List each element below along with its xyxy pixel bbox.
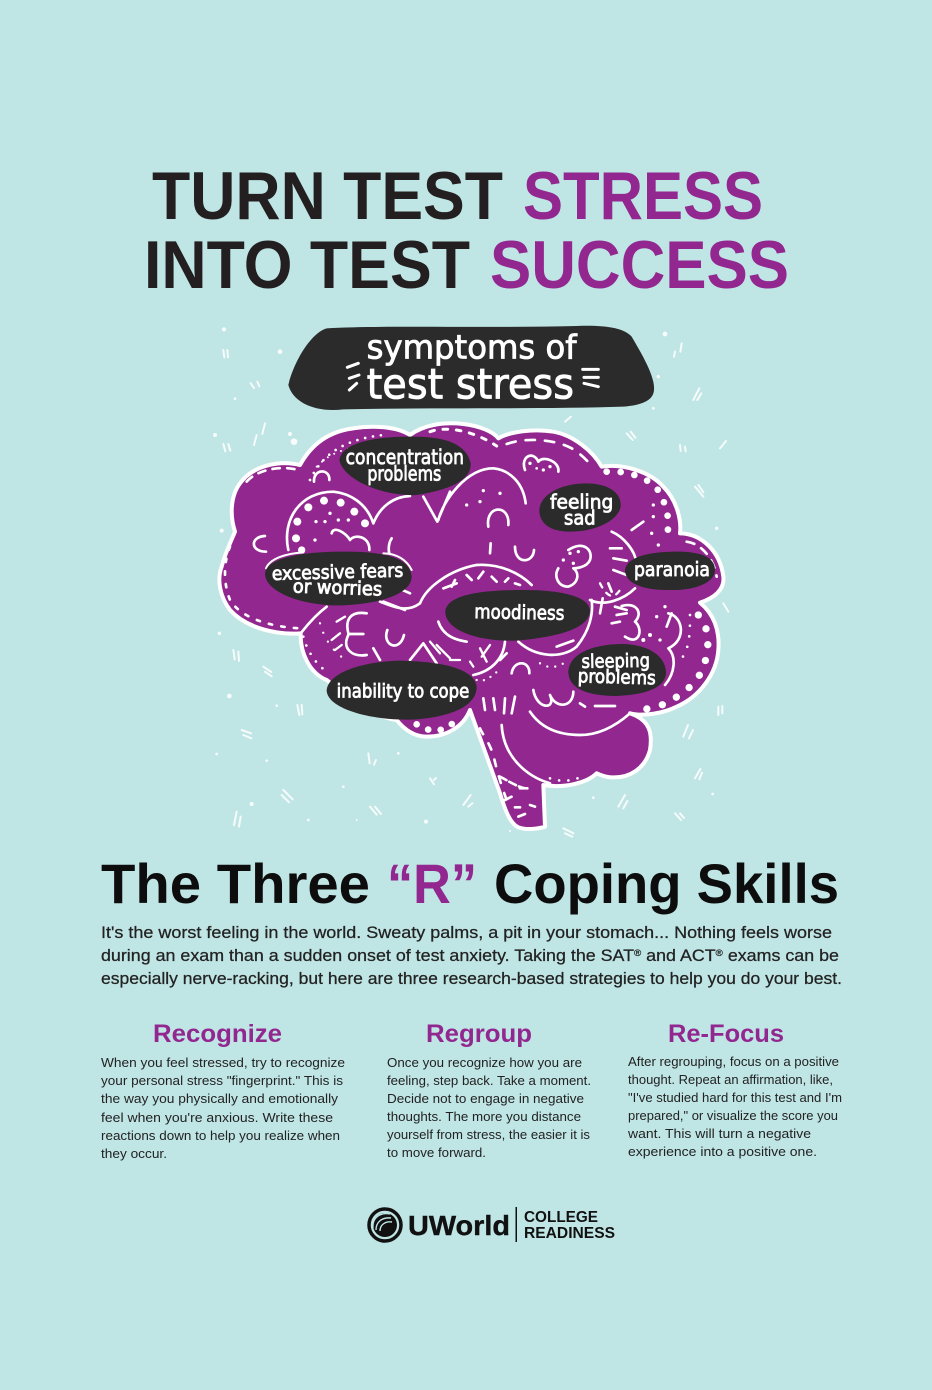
brain folds and line details [254, 456, 681, 783]
column: recognize: reactions down to help you realize when [101, 1128, 340, 1143]
heading: the three R coping skills [101, 852, 839, 915]
column: re-focus: After regrouping, focus on a positive [628, 1054, 839, 1069]
title: STRESS [523, 158, 763, 234]
symptom: moodiness [445, 590, 590, 641]
title bubble: symptoms of test stress [288, 326, 654, 410]
symptom: excessive fears or worries: excessive fears [272, 561, 403, 585]
column: regroup: Once you recognize how you are [387, 1055, 582, 1070]
column: regroup: feeling, step back. Take a moment. [387, 1073, 591, 1088]
column: regroup: Decide not to engage in negative [387, 1091, 584, 1106]
icon: uworld swirl [369, 1209, 401, 1241]
intro paragraph [101, 924, 842, 988]
title [144, 158, 789, 303]
background confetti [223, 343, 728, 837]
logo: uworld college readiness: UWorld [408, 1210, 510, 1241]
intro paragraph: especially nerve-racking, but here are three research-based strategies to help you do your best. [101, 970, 842, 988]
heading: the three R coping skills: “R” [387, 852, 477, 915]
symptom: feeling sad [539, 483, 621, 532]
title: TURN TEST [152, 158, 503, 234]
symptom: moodiness: moodiness [474, 600, 565, 625]
column: recognize: your personal stress "fingerprint." This is [101, 1073, 343, 1088]
column: recognize: feel when you're anxious. Write these [101, 1110, 333, 1125]
intro paragraph: during an exam than a sudden onset of test anxiety. Taking the SAT [101, 947, 594, 965]
symptom: sleeping problems: problems [578, 666, 656, 689]
brain dash and dot borders [225, 429, 717, 817]
symptom: concentration problems [339, 437, 471, 495]
title: SUCCESS [490, 227, 789, 303]
title: INTO TEST [144, 227, 470, 303]
logo: uworld college readiness: COLLEGE [524, 1209, 598, 1226]
column: regroup: Regroup [426, 1020, 532, 1048]
symptom: concentration problems: problems [367, 462, 441, 486]
column: re-focus [627, 1020, 842, 1159]
symptom: feeling sad: feeling [550, 491, 613, 514]
column: recognize: they occur. [101, 1146, 167, 1161]
symptom: feeling sad: sad [564, 507, 596, 530]
intro paragraph: It's the worst feeling in the world. Sweaty palms, a pit in your stomach... Nothing feels worse [101, 924, 832, 942]
column: re-focus: Re-Focus [668, 1020, 784, 1048]
symptom: sleeping problems [568, 644, 666, 696]
symptom: paranoia: paranoia [634, 558, 710, 581]
intro paragraph: ® [634, 948, 642, 958]
heading: the three R coping skills: Coping Skills [494, 852, 839, 915]
heading: the three R coping skills: The Three [101, 852, 370, 915]
column: re-focus: "I've studied hard for this test and I'm [628, 1090, 842, 1105]
intro paragraph: exams can be [723, 947, 839, 965]
column: recognize: When you feel stressed, try to recognize [101, 1055, 345, 1070]
logo: uworld college readiness [369, 1207, 615, 1242]
intro paragraph: and ACT [641, 947, 716, 965]
logo: uworld college readiness: READINESS [524, 1225, 615, 1242]
column: recognize: Recognize [153, 1020, 282, 1048]
column: regroup: to move forward. [387, 1145, 486, 1160]
symptom: inability to cope: inability to cope [337, 681, 469, 702]
title bubble: symptoms of test stress: symptoms of [367, 327, 578, 366]
intro paragraph: ® [716, 948, 723, 958]
column: recognize: the way you physically and emotionally [101, 1091, 338, 1106]
symptom: excessive fears or worries: or worries [292, 576, 383, 601]
symptom: sleeping problems: sleeping [581, 651, 650, 673]
column: re-focus: prepared," or visualize the score you [628, 1108, 838, 1123]
illustration: symptoms of test stress brain [213, 326, 728, 837]
symptom: inability to cope [327, 661, 477, 720]
title bubble: symptoms of test stress: test stress [367, 359, 574, 408]
column: regroup: yourself from stress, the easier it is [387, 1127, 590, 1142]
column: re-focus: experience into a positive one. [628, 1144, 817, 1159]
column: recognize [101, 1020, 345, 1161]
column: re-focus: want. This will turn a negative [627, 1126, 811, 1141]
symptom: excessive fears or worries [265, 552, 412, 605]
symptom: concentration problems: concentration [346, 445, 464, 469]
symptom: paranoia [625, 552, 715, 590]
brain silhouette [219, 423, 723, 829]
column: re-focus: thought. Repeat an affirmation, like, [628, 1072, 833, 1087]
column: regroup: thoughts. The more you distance [387, 1109, 581, 1124]
column: regroup [387, 1020, 591, 1160]
